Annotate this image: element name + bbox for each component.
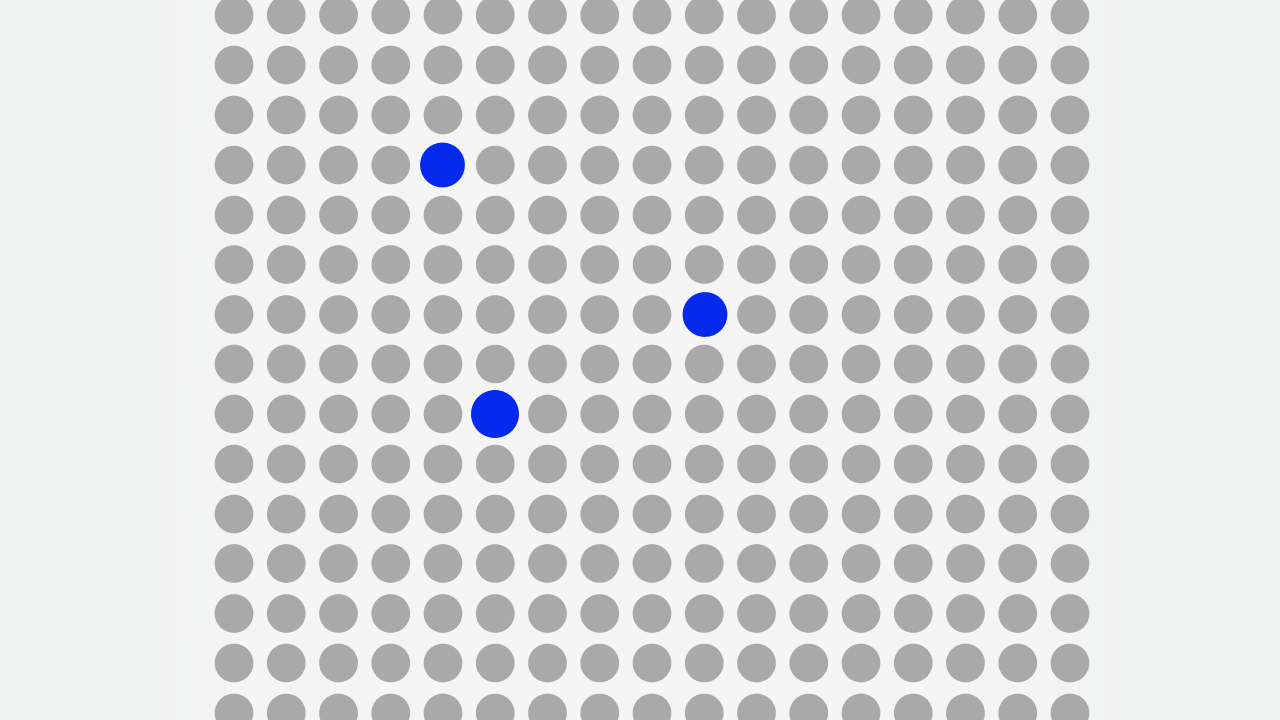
highlighted blue dot 3 xyxy=(471,390,519,438)
grey dot grid xyxy=(215,0,1089,720)
highlighted blue dot 2 xyxy=(683,292,727,337)
highlighted blue dot 1 xyxy=(420,143,465,187)
